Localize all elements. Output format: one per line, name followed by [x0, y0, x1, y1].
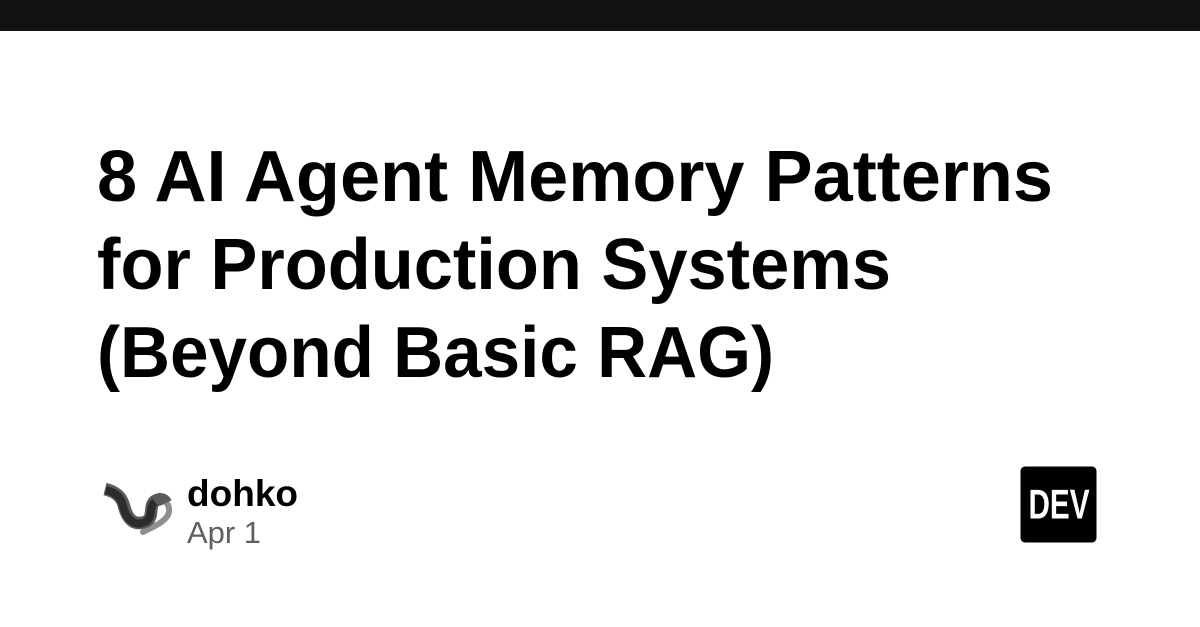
title: 8 AI Agent Memory Patterns [97, 137, 1053, 217]
icon: author avatar snake [105, 489, 169, 532]
title: (Beyond Basic RAG) [97, 313, 774, 393]
icon: DEV logo [1020, 466, 1096, 542]
icon: DEV logo: DEV [1028, 480, 1090, 528]
title: for Production Systems [97, 225, 891, 305]
top bar [0, 0, 1200, 31]
author name: dohko [187, 473, 298, 514]
post date: Apr 1 [187, 515, 261, 550]
title [97, 137, 1053, 393]
